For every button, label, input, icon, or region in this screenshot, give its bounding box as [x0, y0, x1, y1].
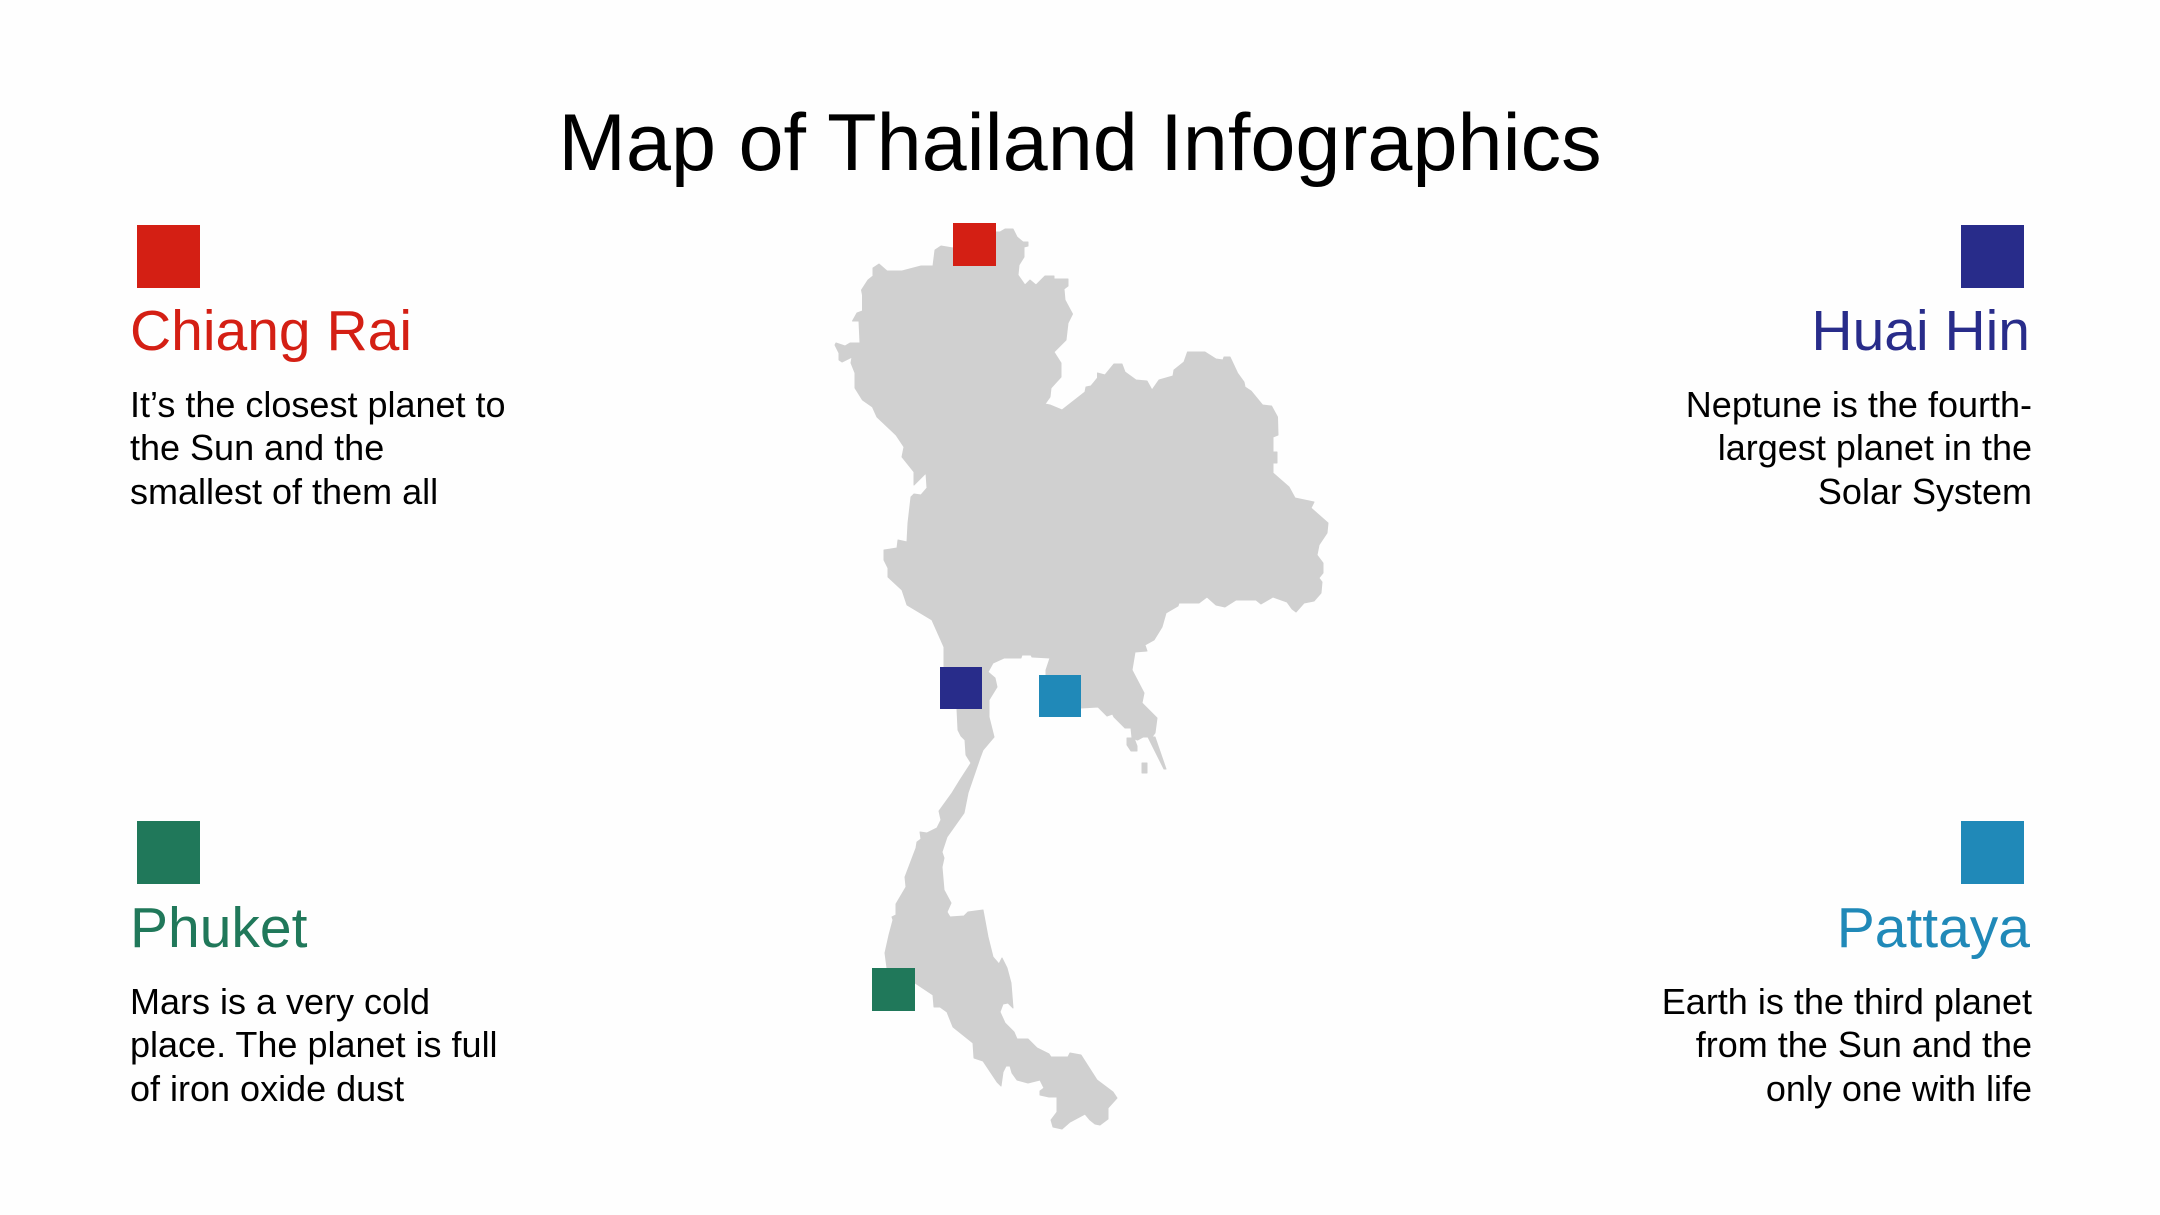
map marker: Pattaya — [1039, 675, 1081, 717]
panel: Chiang Rai — [130, 225, 506, 512]
heading: Pattaya: Pattaya — [1837, 896, 2030, 960]
text block: Pattaya description — [1662, 981, 2032, 1109]
icon: navy square — [1961, 225, 2024, 288]
text block: Chiang Rai description: smallest of them all — [130, 471, 438, 512]
text block: Pattaya description: only one with life — [1766, 1068, 2032, 1109]
panel: Pattaya — [1662, 821, 2032, 1109]
text block: Huai Hin description: Solar System — [1818, 471, 2032, 512]
text block: Phuket description — [130, 981, 498, 1109]
text block: Pattaya description: Earth is the third planet — [1662, 981, 2032, 1022]
panel: Huai Hin — [1686, 225, 2032, 512]
text block: Huai Hin description: Neptune is the fourth- — [1686, 384, 2032, 425]
panel: Phuket — [130, 821, 498, 1109]
text block: Pattaya description: from the Sun and the — [1696, 1024, 2032, 1065]
heading: Huai Hin: Huai Hin — [1811, 299, 2030, 363]
map of Thailand — [835, 229, 1328, 1129]
heading: Chiang Rai: Chiang Rai — [130, 299, 412, 363]
text block: Chiang Rai description — [130, 384, 506, 512]
text block: Phuket description: of iron oxide dust — [130, 1068, 404, 1109]
text block: Chiang Rai description: the Sun and the — [130, 427, 384, 468]
map marker: Phuket — [872, 968, 915, 1011]
heading: Phuket: Phuket — [130, 896, 308, 960]
icon: blue square — [1961, 821, 2024, 884]
text block: Phuket description: place. The planet is full — [130, 1024, 498, 1065]
icon: red square — [137, 225, 200, 288]
text block: Huai Hin description — [1686, 384, 2032, 512]
icon: green square — [137, 821, 200, 884]
map marker: Huai Hin — [940, 667, 982, 709]
text block: Huai Hin description: largest planet in the — [1718, 427, 2032, 468]
text block: Phuket description: Mars is a very cold — [130, 981, 430, 1022]
map marker: Chiang Rai — [953, 223, 996, 266]
text block: Chiang Rai description: It’s the closest planet to — [130, 384, 506, 425]
title: Map of Thailand Infographics — [558, 98, 1602, 188]
